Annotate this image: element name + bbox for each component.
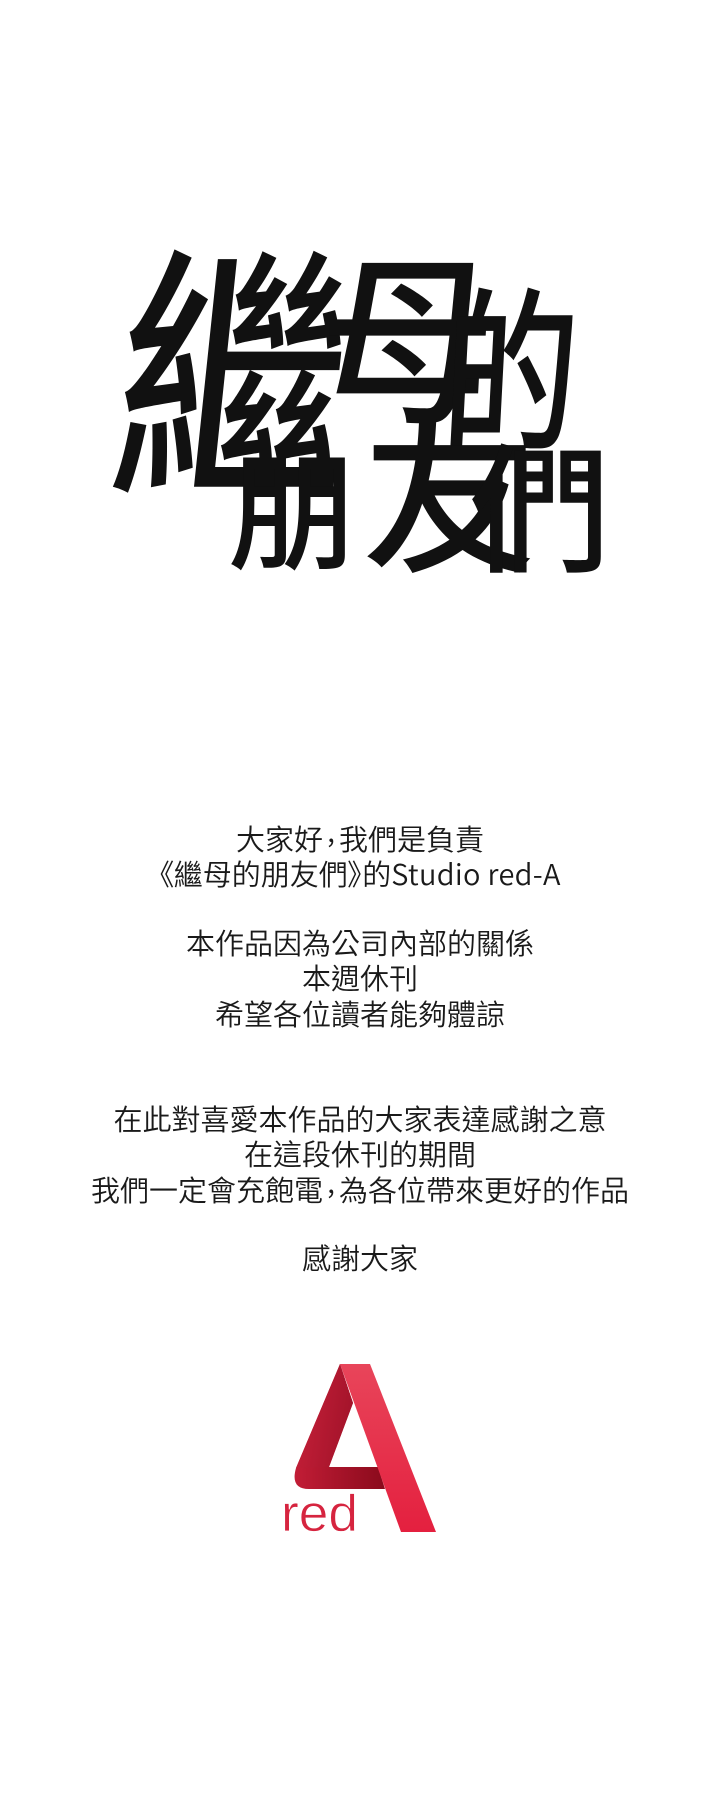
text block: thanks and promise: 在這段休刊的期間: [244, 1132, 476, 1174]
text block: greeting: 大家好 我們是負責: [236, 817, 484, 859]
title: calligraphy logo: 友: [362, 367, 537, 608]
text block: thanks and promise: 我們一定會充飽電 為各位帶來更好的作品: [91, 1168, 629, 1210]
text block: greeting: ,: [327, 809, 335, 851]
text block: hiatus notice: 希望各位讀者能夠體諒: [215, 992, 505, 1034]
title: calligraphy logo: 朋: [228, 411, 356, 596]
text block: greeting: [159, 809, 561, 894]
text block: hiatus notice: 本週休刊: [302, 956, 418, 998]
text block: greeting: 《繼母的朋友們》的Studio red-A: [159, 852, 561, 894]
title: calligraphy logo: 們: [470, 400, 610, 602]
title: calligraphy logo: 繼: [99, 168, 374, 550]
text block: hiatus notice: [186, 921, 534, 1034]
text block: hiatus notice: 本作品因為公司內部的關係: [186, 921, 534, 963]
title: calligraphy logo: [99, 168, 610, 608]
text block: thanks and promise: 在此對喜愛本作品的大家表達感謝之意: [113, 1097, 606, 1139]
text block: thanks and promise: ,: [327, 1160, 335, 1202]
text block: closing: 感謝大家: [302, 1236, 418, 1278]
text block: thanks and promise: [91, 1097, 629, 1210]
logo wordmark: red: [281, 1485, 358, 1543]
title: calligraphy logo: 的: [437, 233, 586, 488]
title: calligraphy logo: 母: [313, 198, 502, 461]
